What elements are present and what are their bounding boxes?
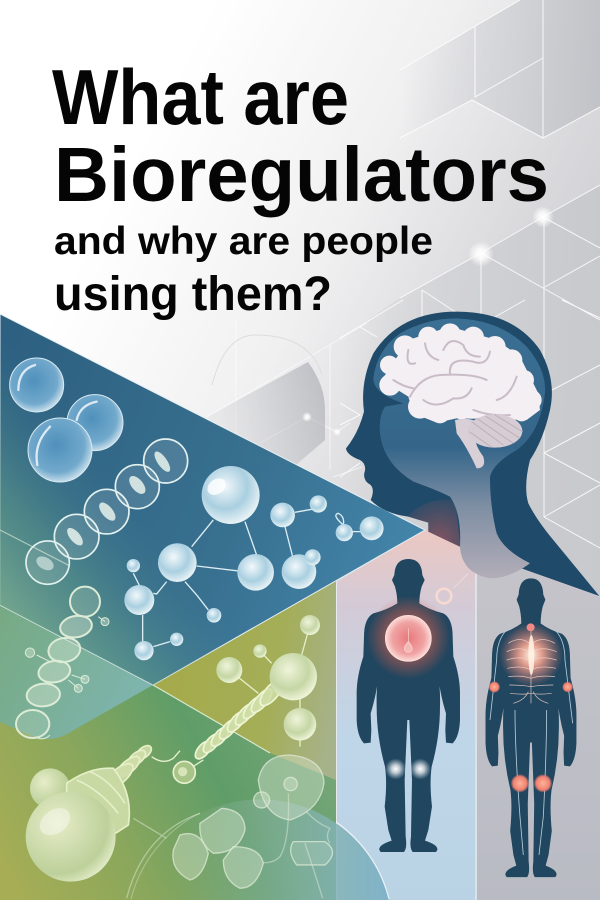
- icon: body figure with nervous system: [486, 578, 576, 877]
- panel: olive triangle: [153, 580, 336, 780]
- ribs and nerves: [507, 630, 557, 703]
- brain folds: [393, 341, 517, 415]
- grey faint shape: [207, 362, 325, 470]
- panel: body columns: [336, 530, 600, 900]
- title: What are: [52, 53, 349, 141]
- glints: [302, 206, 554, 436]
- panel: lower green field: [0, 582, 336, 900]
- title: using them?: [54, 268, 332, 321]
- hexagonal line pattern: [207, 0, 600, 548]
- icon: bead chain: [26, 439, 188, 584]
- connector and ring: [437, 573, 468, 603]
- panel: teal ribbon: [0, 605, 153, 739]
- head interior: [373, 318, 545, 578]
- spine glow: [528, 635, 534, 675]
- icon: large bubbles: [10, 358, 123, 482]
- chest disc: [385, 615, 431, 661]
- icon: head with brain: [346, 312, 599, 596]
- panel: blue corner circle: [131, 799, 389, 900]
- icon: body figure with chest glow: [357, 559, 460, 852]
- silhouette: [486, 578, 576, 877]
- divider lines: [0, 530, 389, 899]
- head silhouette: [346, 312, 599, 596]
- panel: blue triangle: [0, 314, 425, 685]
- knee glows: [385, 758, 406, 780]
- icon: large bulb molecule: [26, 743, 180, 882]
- icon: ribbed peptide molecule: [173, 615, 320, 783]
- icon: molecules: [124, 466, 384, 660]
- neck node: [527, 623, 535, 631]
- silhouette: [357, 559, 460, 852]
- cerebellum and brain stem: [455, 419, 484, 468]
- neck shadow: [407, 500, 461, 547]
- chest glow: [367, 596, 450, 679]
- title: and why are people: [54, 220, 433, 263]
- rib glow: [499, 623, 563, 687]
- brain: [379, 323, 542, 423]
- faint head outline: [212, 335, 322, 385]
- title: Bioregulators: [54, 132, 549, 218]
- background hexagon tones: [340, 0, 600, 600]
- icon: translucent cell cluster: [127, 755, 332, 898]
- joint nodes: [489, 681, 573, 792]
- title: [52, 53, 549, 321]
- icon: translucent helix: [16, 587, 109, 739]
